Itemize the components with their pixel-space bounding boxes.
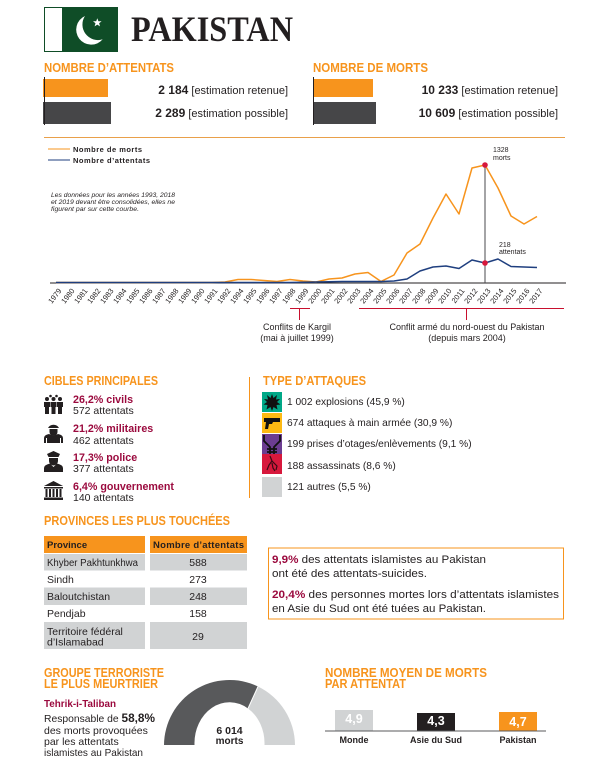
text: assassinats: 188 assassinats (8,6 %) <box>287 461 396 472</box>
year axis labels: 1984 <box>111 287 129 305</box>
year axis labels: 1987 <box>150 287 168 305</box>
text: civils: 26,2% civils <box>73 394 133 406</box>
year axis labels: 2016 <box>514 287 532 305</box>
year axis labels: 2015 <box>501 287 519 305</box>
table: provinces: 248 <box>189 591 207 603</box>
text: responsable: des morts provoquées <box>44 725 148 737</box>
table: provinces: d’Islamabad <box>47 636 104 648</box>
year axis labels: 2004 <box>358 287 376 305</box>
icon: explosions <box>262 392 282 412</box>
text: autres: 121 autres (5,5 %) <box>287 482 371 493</box>
year axis labels: 2012 <box>462 287 480 305</box>
value: attentats possible: 2 289 [estimation possible] <box>155 106 288 120</box>
text: responsable: Responsable de 58,8% <box>44 711 156 725</box>
heading: nombre d'attentats: NOMBRE D’ATTENTATS <box>44 61 174 75</box>
subheading: Tehrik-i-Taliban: Tehrik-i-Taliban <box>44 699 116 710</box>
bar: morts possible <box>313 102 376 124</box>
table: provinces: Territoire fédéral <box>47 626 123 638</box>
bar: asie du sud <box>410 713 462 745</box>
text: attaques à main armée: 674 attaques à main armée (30,9 %) <box>287 418 452 429</box>
title: PAKISTAN <box>131 9 293 49</box>
year axis labels: 2000 <box>306 287 324 305</box>
flag of Pakistan <box>44 8 118 52</box>
bar: monde: 4,9 <box>345 712 363 726</box>
text: responsable: par les attentats <box>44 736 119 748</box>
panel: type d'attaques <box>262 374 472 497</box>
line chart: morts et attentats 1979-2017 <box>46 145 566 343</box>
callout: 1328 morts: 1328 <box>493 147 509 154</box>
year axis labels: 1985 <box>124 287 142 305</box>
heading: nombre moyen: NOMBRE MOYEN DE MORTS <box>325 666 487 680</box>
bar: estimation retenue <box>43 79 108 97</box>
year axis labels: 1998 <box>280 287 298 305</box>
bar: pakistan <box>499 712 537 745</box>
year axis labels: 2002 <box>332 287 350 305</box>
year axis labels: 2001 <box>319 287 337 305</box>
value: morts possible: 10 609 [estimation possible] <box>419 106 558 120</box>
panel: cibles principales <box>44 374 174 504</box>
year axis labels: 2006 <box>384 287 402 305</box>
year axis labels: 2005 <box>371 287 389 305</box>
bar: pakistan: 4,7 <box>509 715 527 729</box>
heading: nombre moyen: PAR ATTENTAT <box>325 677 406 691</box>
year axis labels: 2007 <box>397 287 415 305</box>
table: provinces: Khyber Pakhtunkhwa <box>47 558 138 569</box>
year axis labels: 1986 <box>137 287 155 305</box>
year axis labels: 1999 <box>293 287 311 305</box>
text: explosions: 1 002 explosions (45,9 %) <box>287 397 405 408</box>
table: provinces: Province <box>47 540 87 551</box>
year axis labels: 1981 <box>72 287 90 305</box>
highlight dot: 2013 attentats <box>482 260 488 266</box>
heading: provinces: PROVINCES LES PLUS TOUCHÉES <box>44 513 230 528</box>
bar: asie du sud: Asie du Sud <box>410 735 462 745</box>
value: attentats retenue: 2 184 [estimation retenue] <box>158 83 288 97</box>
chart note: Les données pour les années 1993, 2018 <box>51 192 175 199</box>
table: provinces: Baloutchistan <box>47 591 110 603</box>
value: morts retenue: 10 233 [estimation retenue] <box>422 83 558 97</box>
icon: assassinats <box>262 454 282 474</box>
table: provinces: Nombre d’attentats <box>153 540 244 551</box>
text: prises d'otages: 199 prises d’otages/enlèvements (9,1 %) <box>287 439 472 450</box>
table: provinces: 29 <box>192 631 204 643</box>
blue line: attentats <box>56 259 537 282</box>
callout: 1328 morts: morts <box>493 155 511 162</box>
year axis labels: 1995 <box>241 287 259 305</box>
icon: police <box>44 451 63 472</box>
year axis labels: 1980 <box>59 287 77 305</box>
bar: monde: Monde <box>340 735 368 745</box>
year axis labels: 1982 <box>85 287 103 305</box>
year axis labels: 1991 <box>202 287 220 305</box>
text: civils: 572 attentats <box>73 405 134 417</box>
year axis labels: 1989 <box>176 287 194 305</box>
text: police: 17,3% police <box>73 452 137 464</box>
panel: groupe terroriste <box>44 666 295 759</box>
icon: militaires <box>44 425 63 443</box>
icon: attaques à main armée <box>262 413 282 433</box>
chart legend: Nombre de morts <box>73 145 142 154</box>
year axis labels: 1979 <box>46 287 64 305</box>
year axis labels: 1996 <box>254 287 272 305</box>
highlight dot: 2013 morts <box>482 162 488 168</box>
chart note: et 2019 devant être consolidées, elles ne <box>51 199 175 206</box>
annotation: conflits de Kargil <box>260 308 334 343</box>
callout: attentats-suicides: en Asie du Sud ont été tuées au Pakistan. <box>272 603 486 615</box>
year axis labels: 2003 <box>345 287 363 305</box>
chart legend: Nombre d’attentats <box>73 156 150 165</box>
text: gouvernement: 140 attentats <box>73 492 134 504</box>
callout: attentats-suicides: 9,9% des attentats islamistes au Pakistan <box>272 554 483 566</box>
heading: groupe terroriste: GROUPE TERRORISTE <box>44 666 164 680</box>
icon: autres <box>262 477 282 497</box>
table: provinces: Sindh <box>47 574 74 586</box>
year axis labels: 2017 <box>527 287 545 305</box>
annotation: conflits de Kargil: (mai à juillet 1999) <box>260 333 334 343</box>
donut chart: 58,8%: 6 014 <box>216 725 243 737</box>
heading: groupe terroriste: LE PLUS MEURTRIER <box>44 677 158 691</box>
text: police: 377 attentats <box>73 463 134 475</box>
year axis labels: 2009 <box>423 287 441 305</box>
year axis labels: 1988 <box>163 287 181 305</box>
text: militaires: 462 attentats <box>73 435 134 447</box>
chart note: figurent par sur cette courbe. <box>51 206 139 213</box>
panel: nombre moyen de morts <box>325 666 546 745</box>
year axis labels: 1983 <box>98 287 116 305</box>
year axis labels: 1997 <box>267 287 285 305</box>
heading: cibles principales: CIBLES PRINCIPALES <box>44 374 158 388</box>
annotation: conflit armé du nord-ouest: (depuis mars 2004) <box>428 333 506 343</box>
year axis labels: 2010 <box>436 287 454 305</box>
year axis labels: 2008 <box>410 287 428 305</box>
year axis labels: 1990 <box>189 287 207 305</box>
callout: attentats-suicides: 20,4% des personnes mortes lors d’attentats islamistes <box>272 589 552 601</box>
callout: attentats-suicides: ont été des attentats-suicides. <box>272 568 427 580</box>
year axis labels: 1994 <box>228 287 246 305</box>
table: provinces: 588 <box>189 557 207 569</box>
panel: nombre d'attentats <box>43 61 288 125</box>
text: gouvernement: 6,4% gouvernement <box>73 481 174 493</box>
icon: gouvernement <box>44 481 63 500</box>
donut chart: 58,8%: morts <box>216 736 244 747</box>
bar: estimation possible <box>43 102 111 124</box>
year axis labels: 2013 <box>475 287 493 305</box>
text: responsable: islamistes au Pakistan <box>44 747 143 759</box>
table: provinces <box>44 536 247 649</box>
year axis labels: 1992 <box>215 287 233 305</box>
panel: nombre de morts <box>313 61 558 125</box>
table: provinces: 273 <box>189 574 207 586</box>
orange line: morts <box>56 165 537 282</box>
annotation: conflits de Kargil: Conflits de Kargil <box>263 322 331 332</box>
bar: morts retenue <box>313 79 373 97</box>
callout: attentats-suicides <box>268 548 564 619</box>
year axis labels: 2014 <box>488 287 506 305</box>
panel: provinces les plus touchées <box>44 513 247 649</box>
icon: civils <box>44 395 63 414</box>
text: militaires: 21,2% militaires <box>73 423 153 435</box>
bar: monde <box>335 710 373 745</box>
annotation: conflit armé du nord-ouest: Conflit armé du nord-ouest du Pakistan <box>390 322 544 332</box>
icon: prises d'otages <box>262 434 282 454</box>
heading: nombre de morts: NOMBRE DE MORTS <box>313 61 428 75</box>
year axis labels <box>46 287 545 305</box>
bar: asie du sud: 4,3 <box>427 714 445 728</box>
table: provinces: 158 <box>189 608 207 620</box>
annotation: conflit armé du nord-ouest <box>359 308 564 343</box>
chart legend <box>48 145 150 165</box>
bar: pakistan: Pakistan <box>499 735 537 745</box>
year axis labels: 2011 <box>450 287 467 305</box>
callout: 218 attentats: 218 <box>499 242 511 249</box>
callout: 218 attentats: attentats <box>499 249 526 256</box>
table: provinces: Pendjab <box>47 608 86 620</box>
heading: type d'attaques: TYPE D’ATTAQUES <box>263 374 366 388</box>
donut chart: 58,8% <box>164 680 295 747</box>
